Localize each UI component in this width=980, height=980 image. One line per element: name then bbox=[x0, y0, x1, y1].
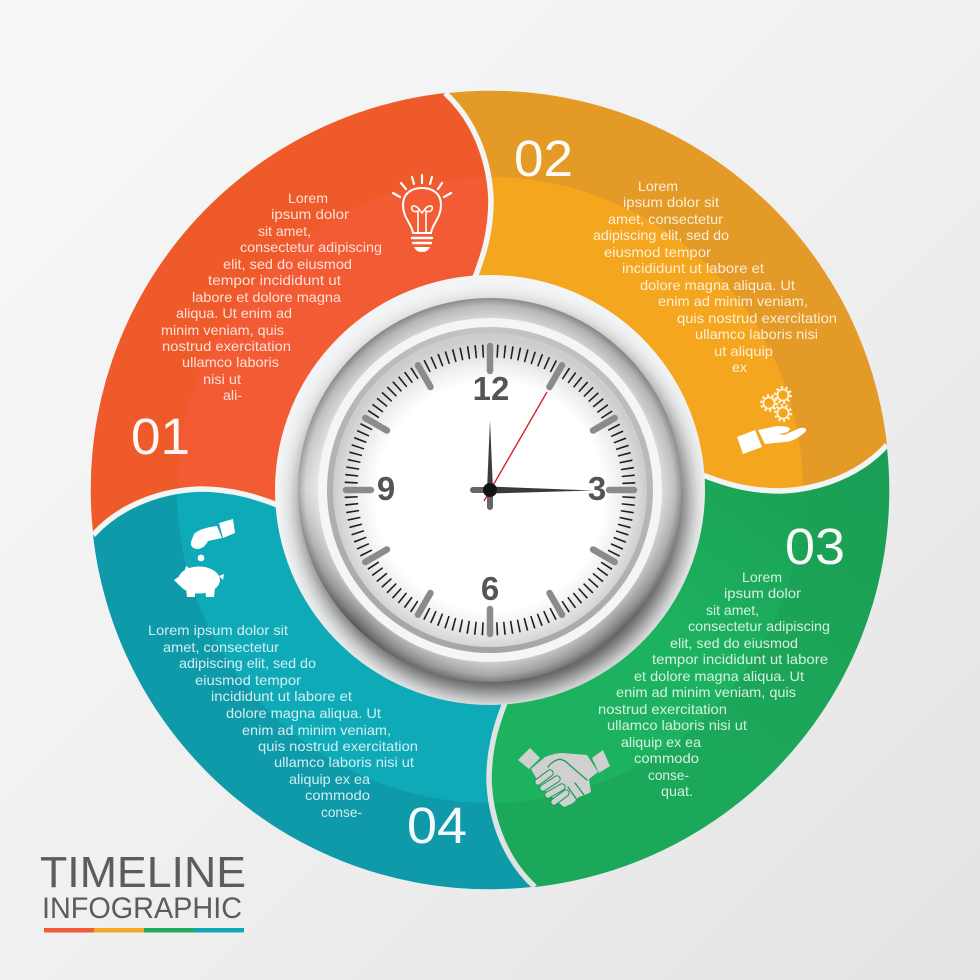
text block 04: amet, consectetur bbox=[163, 640, 280, 655]
number 02: 02 bbox=[514, 130, 573, 187]
icon: hand dropping coin into piggy bank bbox=[174, 519, 235, 597]
text block 03: Lorem bbox=[742, 570, 782, 585]
text block 01: aliqua. Ut enim ad bbox=[176, 306, 292, 321]
title: TIMELINE INFOGRAPHIC bbox=[40, 848, 246, 932]
text block 02: ut aliquip bbox=[714, 344, 773, 359]
hour ticks bbox=[346, 346, 634, 634]
panel: 02 orange segment bbox=[448, 91, 887, 491]
text block 02: Lorem bbox=[638, 179, 678, 194]
text block 02: adipiscing elit, sed do bbox=[593, 228, 729, 243]
text block 04: incididunt ut labore et bbox=[211, 689, 352, 704]
text block 01: tempor incididunt ut bbox=[208, 273, 341, 288]
text block 03: ipsum dolor bbox=[724, 586, 802, 601]
text block 03: tempor incididunt ut labore bbox=[652, 652, 828, 667]
text block 03: elit, sed do eiusmod bbox=[670, 636, 798, 651]
text block 02: ullamco laboris nisi bbox=[695, 327, 818, 342]
text block 01: ullamco laboris bbox=[182, 355, 279, 370]
number 01: 01 bbox=[131, 408, 190, 465]
text block 01: nostrud exercitation bbox=[162, 339, 291, 354]
text block 04: ullamco laboris nisi ut bbox=[274, 755, 414, 770]
text block 02: ex bbox=[732, 360, 747, 375]
text block 02: enim ad minim veniam, bbox=[658, 294, 808, 309]
text block 02 bbox=[593, 179, 837, 375]
clock numerals: 6 bbox=[481, 570, 499, 607]
text block 02: eiusmod tempor bbox=[604, 245, 712, 260]
panel: 01 red segment bbox=[91, 93, 491, 532]
text block 03: commodo bbox=[634, 751, 699, 766]
text block 02: amet, consectetur bbox=[608, 212, 724, 227]
text block 01: ipsum dolor bbox=[271, 207, 350, 222]
clock numerals bbox=[377, 370, 606, 607]
panel: 04 teal segment bbox=[93, 489, 532, 889]
text block 04: quis nostrud exercitation bbox=[258, 739, 418, 754]
text block 03: ullamco laboris nisi ut bbox=[607, 718, 747, 733]
text block 02: incididunt ut labore et bbox=[622, 261, 764, 276]
clock numerals: 3 bbox=[588, 470, 606, 507]
text block 01: consectetur adipiscing bbox=[240, 240, 382, 255]
text block 02: dolore magna aliqua. Ut bbox=[640, 278, 795, 293]
text block 03: quat. bbox=[661, 784, 693, 799]
metal bezel bbox=[298, 298, 682, 682]
text block 01 bbox=[161, 191, 382, 403]
text block 04: commodo bbox=[305, 788, 370, 803]
text block 01: sit amet, bbox=[258, 224, 311, 239]
text block 01: minim veniam, quis bbox=[161, 323, 284, 338]
text block 03: consectetur adipiscing bbox=[688, 619, 830, 634]
text block 02: ipsum dolor sit bbox=[623, 195, 719, 210]
icon: light bulb bbox=[393, 175, 451, 252]
icon: handshake bbox=[518, 748, 610, 807]
text block 04: adipiscing elit, sed do bbox=[179, 656, 316, 671]
text block 01: ali- bbox=[223, 388, 242, 403]
text block 03: nostrud exercitation bbox=[598, 702, 727, 717]
title: TIMELINE INFOGRAPHIC: INFOGRAPHIC bbox=[42, 892, 242, 925]
text block 04: dolore magna aliqua. Ut bbox=[226, 706, 381, 721]
clock numerals: 9 bbox=[377, 470, 395, 507]
text block 04: eiusmod tempor bbox=[195, 673, 302, 688]
text block 01: nisi ut bbox=[203, 372, 241, 387]
text block 04: Lorem ipsum dolor sit bbox=[148, 623, 288, 638]
seams between segments bbox=[93, 93, 887, 887]
text block 04: conse- bbox=[321, 805, 362, 820]
text block 03: sit amet, bbox=[706, 603, 759, 618]
text block 03: et dolore magna aliqua. Ut bbox=[634, 669, 804, 684]
text block 03: conse- bbox=[648, 768, 689, 783]
number 04: 04 bbox=[407, 797, 467, 854]
clock hands bbox=[473, 392, 593, 507]
text block 03: aliquip ex ea bbox=[621, 735, 701, 750]
title: TIMELINE INFOGRAPHIC: TIMELINE bbox=[40, 848, 246, 897]
clock numerals: 12 bbox=[473, 370, 509, 407]
text block 03 bbox=[598, 570, 830, 799]
text block 01: elit, sed do eiusmod bbox=[223, 257, 352, 272]
text block 01: labore et dolore magna bbox=[192, 290, 341, 305]
text block 03: enim ad minim veniam, quis bbox=[616, 685, 796, 700]
text block 04: aliquip ex ea bbox=[289, 772, 370, 787]
panel: 03 green segment bbox=[489, 448, 889, 887]
text block 02: quis nostrud exercitation bbox=[677, 311, 837, 326]
text block 01: Lorem bbox=[288, 191, 328, 206]
icon: hand with gears bbox=[737, 387, 806, 454]
white disc behind the clock with soft shadow bbox=[275, 275, 705, 705]
text block 04: enim ad minim veniam, bbox=[242, 723, 391, 738]
text block 04 bbox=[148, 623, 418, 820]
number 03: 03 bbox=[785, 518, 845, 575]
minute ticks bbox=[351, 351, 629, 629]
